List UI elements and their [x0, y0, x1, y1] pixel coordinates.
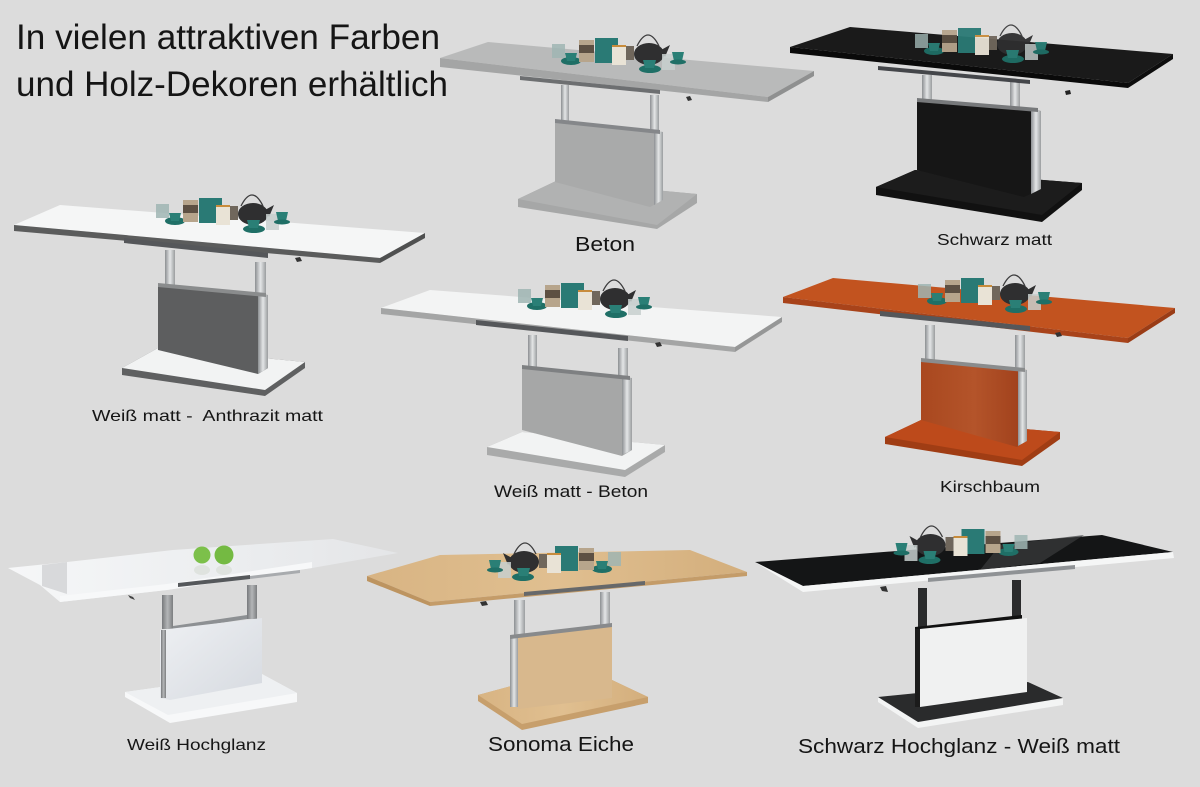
apples — [194, 546, 234, 575]
label: Weiß matt - Beton: Weiß matt - Beton — [494, 483, 648, 501]
table: Sonoma Eiche — [367, 543, 747, 730]
label: Schwarz matt: Schwarz matt — [937, 232, 1053, 249]
label: Weiß Hochglanz: Weiß Hochglanz — [127, 737, 266, 754]
table: Kirschbaum — [783, 275, 1175, 466]
label: Schwarz Hochglanz - Weiß matt: Schwarz Hochglanz - Weiß matt — [798, 736, 1120, 758]
title: In vielen attraktiven Farben — [16, 18, 440, 57]
table: Schwarz matt — [790, 25, 1173, 222]
table: Weiß Hochglanz — [8, 539, 398, 723]
label: Weiß matt - Anthrazit matt: Weiß matt - Anthrazit matt — [92, 408, 324, 425]
label: Kirschbaum: Kirschbaum — [940, 479, 1040, 496]
title — [16, 18, 448, 104]
label: Beton: Beton — [575, 234, 635, 256]
label: Sonoma Eiche: Sonoma Eiche — [488, 734, 634, 756]
table: Schwarz Hochglanz - Weiß matt — [755, 526, 1174, 728]
title: und Holz-Dekoren erhältlich — [16, 65, 448, 104]
table: Weiß matt - Beton — [381, 280, 782, 477]
table: Weiß matt - Anthrazit matt — [14, 195, 425, 396]
table: Beton — [440, 35, 814, 229]
